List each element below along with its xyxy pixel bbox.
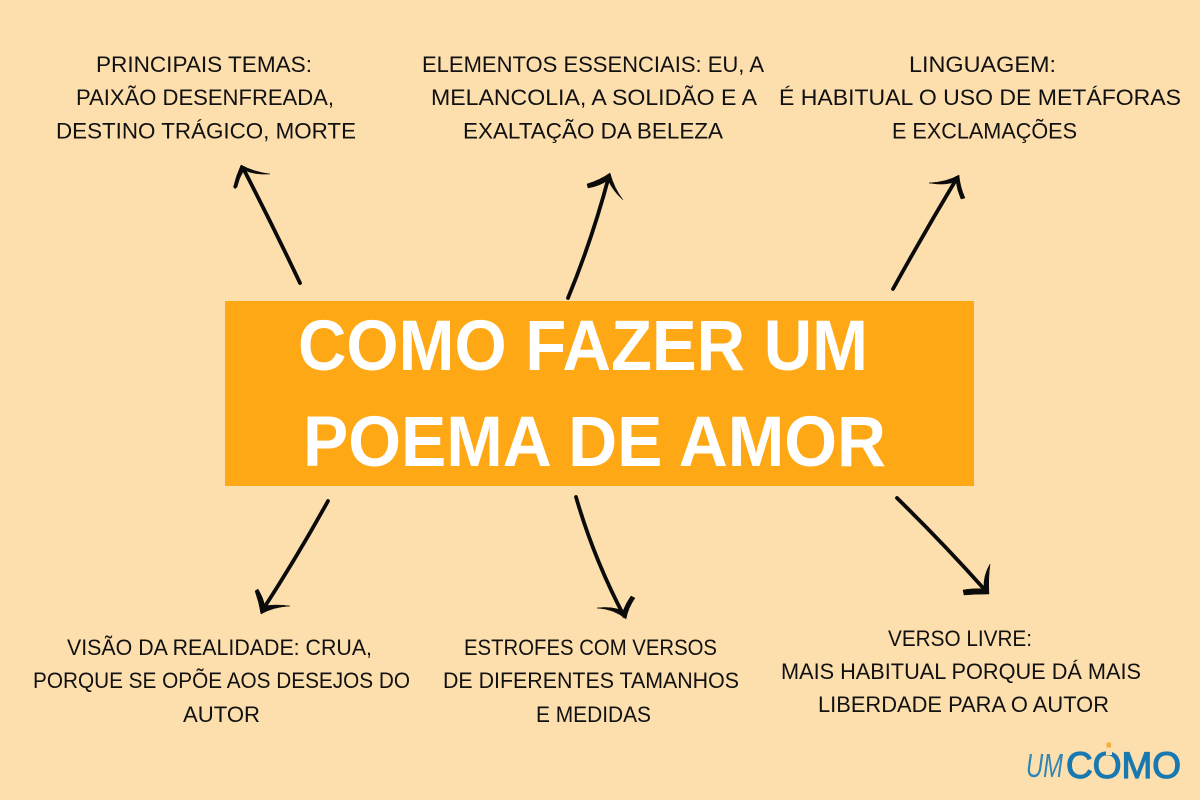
text block: elementos essenciais [422, 52, 764, 144]
arrow: to estrofes [576, 497, 635, 619]
text block: verso livre: LIBERDADE PARA O AUTOR [818, 692, 1109, 717]
logo: umCOMO: UM [1026, 747, 1063, 784]
text block: verso livre: MAIS HABITUAL PORQUE DÁ MAIS [781, 659, 1141, 684]
text block: principais temas: PAIXÃO DESENFREADA, [76, 85, 334, 110]
logo: umCOMO: COMO [1066, 745, 1181, 786]
text block: visão da realidade: VISÃO DA REALIDADE: CRUA, [67, 635, 372, 660]
text block: estrofes [443, 635, 739, 727]
text block: principais temas [56, 52, 356, 144]
text block: visão da realidade [33, 635, 410, 727]
panel: central title banner [225, 301, 974, 486]
arrow: to verso livre [897, 498, 990, 595]
text block: visão da realidade: PORQUE SE OPÕE AOS DESEJOS DO [33, 668, 410, 693]
title [298, 307, 886, 482]
text block: principais temas: DESTINO TRÁGICO, MORTE [56, 118, 356, 144]
logo: umCOMO [1026, 742, 1181, 786]
text block: linguagem: LINGUAGEM: [909, 52, 1056, 77]
text block: elementos essenciais: MELANCOLIA, A SOLIDÃO E A [431, 85, 757, 110]
arrow: to elementos essenciais [568, 173, 623, 298]
text block: visão da realidade: AUTOR [183, 702, 260, 727]
title: COMO FAZER UM [298, 307, 868, 386]
text block: estrofes: DE DIFERENTES TAMANHOS [443, 668, 739, 693]
text block: elementos essenciais: ELEMENTOS ESSENCIAIS: EU, A [422, 52, 764, 77]
text block: verso livre: VERSO LIVRE: [888, 626, 1032, 651]
icon: logo dot [1106, 742, 1111, 748]
text block: linguagem: É HABITUAL O USO DE METÁFORAS [779, 85, 1181, 110]
text block: principais temas: PRINCIPAIS TEMAS: [96, 52, 312, 77]
arrow: to visão da realidade [255, 501, 328, 614]
text block: elementos essenciais: EXALTAÇÃO DA BELEZA [463, 118, 723, 144]
text block: estrofes: ESTROFES COM VERSOS [464, 635, 717, 660]
title: POEMA DE AMOR [303, 403, 886, 482]
arrow: to principais temas [234, 165, 300, 283]
text block: verso livre [781, 626, 1141, 717]
text block: linguagem: E EXCLAMAÇÕES [892, 118, 1077, 144]
arrow: to linguagem [893, 175, 965, 289]
text block: linguagem [779, 52, 1181, 144]
text block: estrofes: E MEDIDAS [536, 702, 651, 727]
